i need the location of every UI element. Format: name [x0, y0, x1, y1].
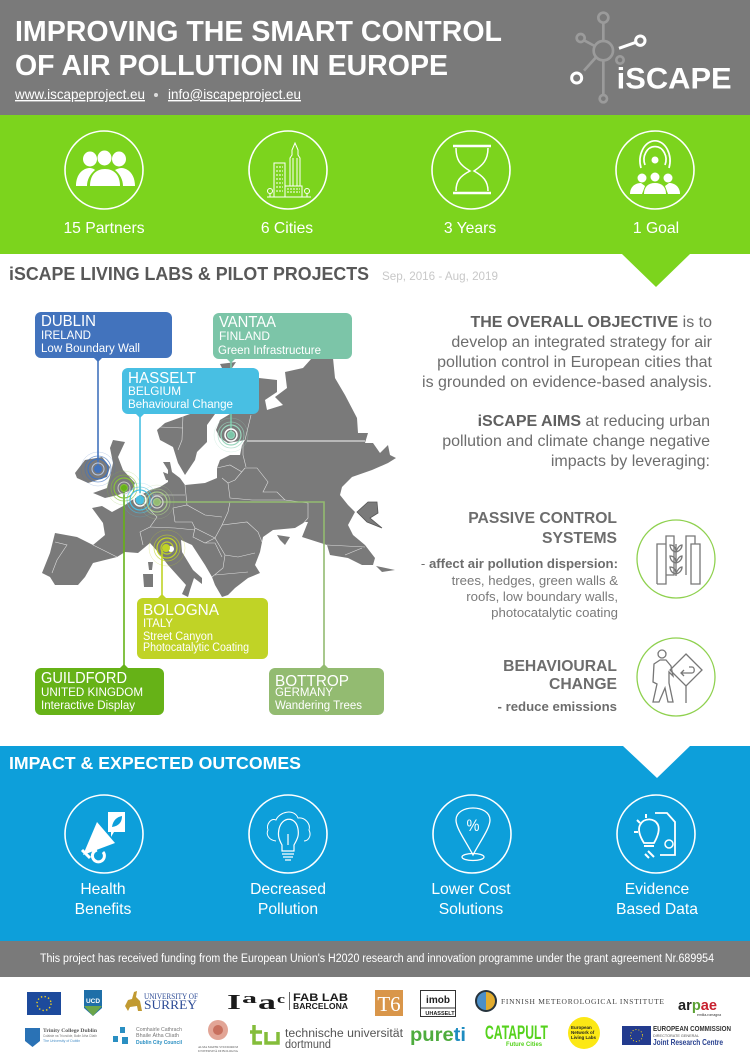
label: health benefits: Health — [80, 881, 126, 898]
funding statement bar — [0, 941, 750, 977]
callout: Dublin: IRELAND — [41, 328, 91, 342]
logo: University of Bologna: UNIVERSITÀ DI BOLOGNA — [198, 1048, 238, 1053]
logo: IaaC Fab Lab Barcelona: BARCELONA — [293, 1002, 348, 1011]
logo: Trinity College Dublin — [25, 1028, 97, 1047]
logo: European Network of Living Labs — [568, 1017, 600, 1049]
callout: Dublin — [35, 312, 172, 358]
icon: decreased pollution — [249, 795, 327, 873]
callout: Hasselt — [122, 368, 259, 414]
logo: Catapult Future Cities: Future Cities — [506, 1041, 542, 1048]
icon: health benefits — [65, 795, 143, 873]
icon: lower cost solutions: % — [466, 816, 480, 835]
logo: orange T6: T6 — [377, 992, 401, 1016]
callout: Hasselt: Behavioural Change — [128, 397, 233, 411]
label: lower cost solutions: Lower Cost — [431, 881, 511, 898]
connector lines — [98, 358, 324, 668]
logo: IaaC Fab Lab Barcelona: FAB LAB — [293, 992, 348, 1004]
callout: Bologna: ITALY — [143, 616, 173, 630]
callout: Bologna: BOLOGNA — [143, 602, 220, 619]
logo: IaaC Fab Lab Barcelona — [227, 990, 348, 1014]
label: decreased pollution: Pollution — [258, 901, 318, 918]
logo: European Commission JRC — [622, 1026, 731, 1047]
callout: Bologna: Street Canyon — [143, 629, 213, 643]
logo: UCD: UCD — [86, 998, 100, 1005]
label: decreased pollution: Decreased — [250, 881, 326, 898]
label: partners: 15 Partners — [63, 220, 145, 237]
label: decreased pollution — [250, 881, 326, 918]
title: IMPROVING THE SMART CONTROL — [15, 16, 502, 48]
logo: imob Uhasselt — [420, 990, 456, 1017]
logo: IaaC Fab Lab Barcelona: a — [258, 990, 277, 1014]
logo: European Commission JRC: EUROPEAN COMMISSION — [653, 1026, 731, 1033]
logo: Trinity College Dublin: The University of Dublin — [43, 1039, 80, 1043]
text block: passive control systems: photocatalytic coating — [491, 605, 618, 620]
logo: University of Surrey: SURREY — [144, 997, 198, 1012]
icon: lower cost solutions — [433, 795, 511, 873]
callout: Vantaa: FINLAND — [219, 329, 270, 343]
text block: passive control systems: PASSIVE CONTROL — [468, 510, 617, 527]
logo: imob Uhasselt: imob — [426, 995, 450, 1006]
text block: behavioural change: - reduce emissions — [498, 699, 617, 714]
text block: overall objective: is grounded on evidence-based analysis. — [422, 374, 712, 391]
callout: Bologna — [137, 598, 268, 659]
icon: goal — [616, 131, 694, 209]
title: OF AIR POLLUTION IN EUROPE — [15, 50, 448, 82]
callout: Hasselt: BELGIUM — [128, 384, 181, 398]
callout: Bottrop — [269, 668, 384, 715]
section heading: living labs: iSCAPE LIVING LABS & PILOT PROJECTS — [9, 263, 369, 284]
marker: Guildford — [107, 471, 141, 505]
logo: Dublin City Council: Comhairle Cathrach — [136, 1027, 182, 1033]
logo: Catapult Future Cities: CATAPULT — [485, 1023, 548, 1044]
text block: overall objective: THE OVERALL OBJECTIVE is to — [470, 314, 712, 331]
label: health benefits — [75, 881, 131, 918]
text block: behavioural change — [498, 658, 617, 714]
connector tabs — [94, 358, 328, 668]
logo: IaaC Fab Lab Barcelona: I — [227, 990, 241, 1014]
logo: European Commission JRC: Joint Research Centre — [653, 1038, 723, 1047]
logo: IaaC Fab Lab Barcelona: c — [277, 991, 285, 1006]
title — [15, 16, 502, 82]
marker: Bologna — [149, 530, 185, 566]
text block: behavioural change: BEHAVIOURAL — [503, 658, 617, 675]
marker: Dublin — [81, 452, 115, 486]
label: cities: 6 Cities — [261, 220, 313, 237]
label: goal: 1 Goal — [633, 220, 679, 237]
text block: iSCAPE aims: iSCAPE AIMS at reducing urban — [478, 413, 710, 430]
logo: IaaC Fab Lab Barcelona: a — [242, 991, 258, 1007]
icon: hourglass — [432, 131, 510, 209]
green key figures panel — [0, 115, 750, 254]
project links: www.iscapeproject.eu — [14, 86, 145, 102]
iSCAPE logo — [572, 13, 732, 102]
logo: Trinity College Dublin: Coláiste na Tríonóide, Baile Átha Cliath — [43, 1034, 97, 1038]
logo: Finnish Meteorological Institute — [475, 990, 664, 1012]
callout: Guildford: UNITED KINGDOM — [41, 685, 143, 699]
logo: European Network of Living Labs: Network of — [571, 1030, 595, 1035]
logo: European Commission JRC: DIRECTORATE GENERAL — [653, 1034, 699, 1038]
section heading: living labs: Sep, 2016 - Aug, 2019 — [382, 269, 498, 283]
icon: cities — [249, 131, 327, 209]
callout: Bottrop: GERMANY — [275, 685, 333, 699]
blue outcomes panel — [0, 746, 750, 941]
label: lower cost solutions — [431, 881, 511, 918]
logo: pureti: pureti — [410, 1025, 466, 1046]
green pointer arrow — [622, 254, 690, 287]
partner logos — [25, 990, 731, 1053]
logo: University of Bologna: ALMA MATER STUDIORUM — [198, 1045, 239, 1049]
callout: Vantaa: Green Infrastructure — [218, 343, 321, 357]
text block: passive control systems — [421, 510, 618, 620]
logo: EU flag — [27, 992, 61, 1015]
logo: imob Uhasselt: UHASSELT — [425, 1011, 455, 1017]
callout: Guildford: Interactive Display — [41, 698, 136, 712]
logo: TU Dortmund — [250, 1025, 404, 1051]
funding statement bar: This project has received funding from the European Union's H2020 research and innovation programme under the grant agreement Nr.689954 — [40, 953, 715, 965]
heading: impact: IMPACT & EXPECTED OUTCOMES — [9, 753, 301, 773]
callout: Bologna: Photocatalytic Coating — [143, 640, 249, 654]
logo: University of Surrey: UNIVERSITY OF — [144, 991, 198, 1001]
logo: European Network of Living Labs: European — [571, 1025, 592, 1030]
logo: University of Bologna — [198, 1020, 239, 1053]
text block: passive control systems: SYSTEMS — [542, 530, 617, 547]
label: lower cost solutions: Solutions — [439, 901, 503, 918]
marker: Hasselt — [123, 483, 157, 517]
icon: passive control — [637, 520, 715, 598]
logo: Dublin City Council: Bhaile Átha Cliath — [136, 1032, 179, 1039]
logo: Dublin City Council — [113, 1027, 183, 1046]
text block: behavioural change: CHANGE — [549, 676, 617, 693]
logo: TU Dortmund: technische universität — [285, 1028, 404, 1040]
callout: Dublin: DUBLIN — [41, 313, 96, 330]
logo: arpae: arpae — [678, 997, 717, 1014]
text block: overall objective: develop an integrated strategy for air — [451, 334, 713, 351]
logo: arpae: emilia-romagna — [697, 1013, 721, 1017]
icon: evidence based data — [617, 795, 695, 873]
logo: UCD — [84, 990, 102, 1016]
text block: passive control systems: trees, hedges, green walls & — [452, 573, 618, 588]
logo: Catapult Future Cities — [485, 1023, 548, 1048]
callout: Bottrop: BOTTROP — [275, 673, 349, 690]
logo: European Network of Living Labs: Living Labs — [571, 1035, 596, 1040]
project links: info@iscapeproject.eu — [168, 86, 301, 102]
logo: University of Surrey — [125, 991, 198, 1012]
icon: behavioural change — [637, 638, 715, 716]
label: health benefits: Benefits — [75, 901, 131, 918]
callout: Dublin: Low Boundary Wall — [41, 341, 140, 355]
label: evidence based data — [616, 881, 698, 918]
text block: passive control systems: - affect air pollution dispersion: — [421, 556, 618, 571]
callout: Bottrop: Wandering Trees — [275, 698, 362, 712]
text block: iSCAPE aims — [442, 413, 710, 470]
icon: partners — [65, 131, 143, 209]
map of Europe with pilot cities — [42, 358, 396, 668]
callout: Vantaa: VANTAA — [219, 314, 277, 331]
callout: Guildford — [35, 668, 164, 715]
text block: iSCAPE aims: impacts by leveraging: — [551, 453, 710, 470]
label: years: 3 Years — [444, 220, 496, 237]
header panel — [0, 0, 750, 115]
logo: Finnish Meteorological Institute: FINNISH METEOROLOGICAL INSTITUTE — [501, 997, 664, 1006]
label: evidence based data: Based Data — [616, 901, 698, 918]
text block: overall objective — [422, 314, 713, 391]
iSCAPE logo: iSCAPE — [617, 63, 732, 96]
marker: Vantaa — [214, 418, 248, 452]
logo: TU Dortmund: dortmund — [285, 1039, 331, 1051]
callout: Hasselt: HASSELT — [128, 370, 197, 387]
marker: Bottrop — [140, 485, 174, 519]
callout: Vantaa — [213, 313, 352, 359]
project links — [14, 86, 301, 102]
logo: Trinity College Dublin: Trinity College Dublin — [43, 1028, 97, 1034]
text block: iSCAPE aims: pollution and climate change negative — [442, 433, 710, 450]
text block: passive control systems: roofs, low boundary walls, — [466, 589, 618, 604]
label: evidence based data: Evidence — [625, 881, 690, 898]
logo: Dublin City Council: Dublin City Council — [136, 1040, 183, 1046]
callout: Guildford: GUILDFORD — [41, 670, 127, 687]
text block: overall objective: pollution control in European cities that — [437, 354, 713, 371]
